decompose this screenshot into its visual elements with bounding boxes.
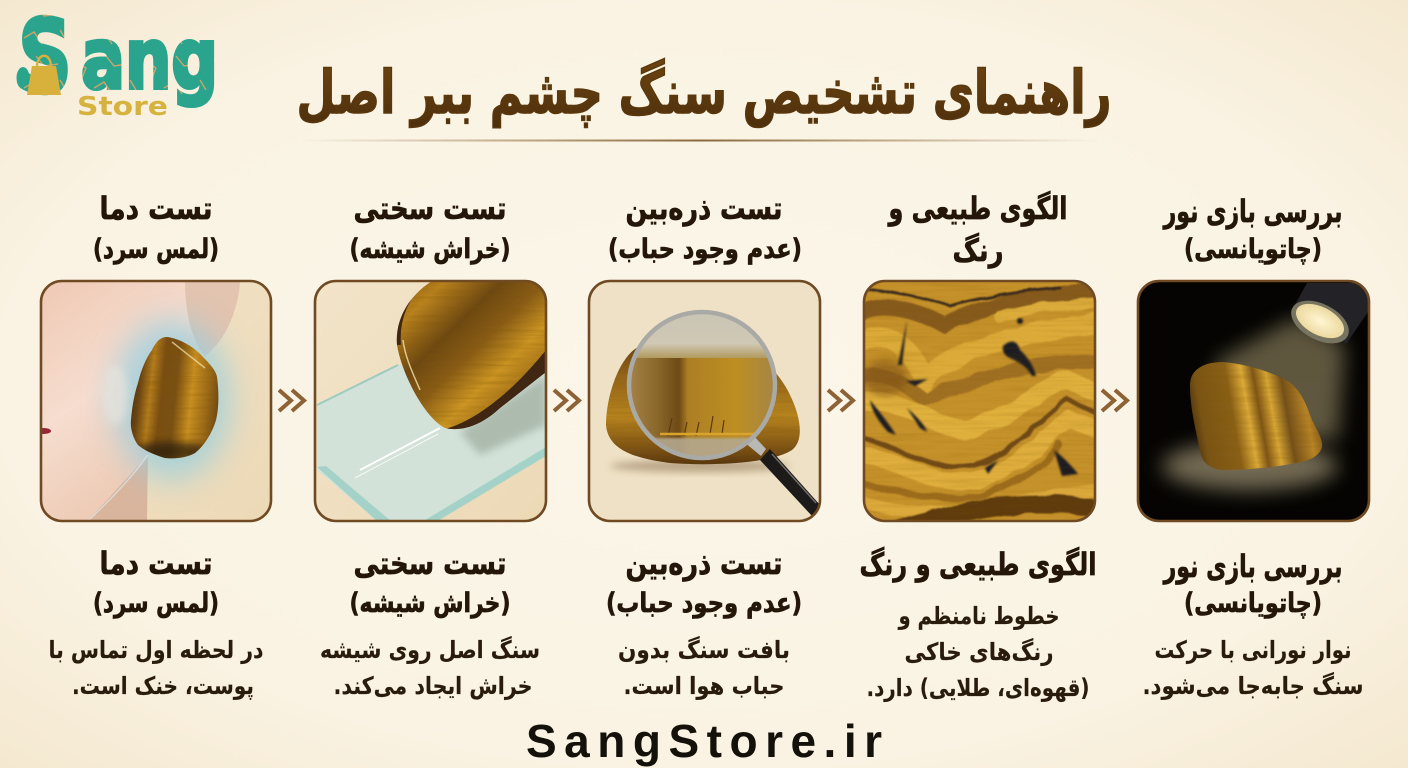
heading: column 3 top bbox=[608, 191, 802, 265]
column 1 caption: در لحظه اول تماس با bbox=[48, 636, 264, 664]
column 1 caption bbox=[48, 546, 264, 700]
icon: spotlight lamp bbox=[1291, 283, 1368, 344]
logo: Sang Store: S bbox=[18, 0, 72, 117]
glass plate bbox=[316, 364, 545, 520]
heading: column 3 top: تست ذره‌بین bbox=[626, 191, 782, 227]
column 3 caption: تست ذره‌بین bbox=[626, 546, 782, 582]
panel 1: temperature test image bbox=[37, 280, 272, 522]
heading: column 2 top bbox=[350, 191, 510, 265]
column 3 caption: حباب هوا است. bbox=[624, 672, 784, 700]
arrow 4 bbox=[1102, 390, 1127, 411]
heading: column 4 top: رنگ bbox=[952, 233, 1004, 269]
panel 3: magnifier test image bbox=[588, 280, 820, 522]
arrow 1 bbox=[279, 390, 304, 411]
logo: Sang Store bbox=[16, 0, 218, 122]
column 1 caption: تست دما bbox=[100, 546, 212, 582]
icon: tiger eye stone scratching glass bbox=[396, 282, 545, 430]
column 1 caption: (لمس سرد) bbox=[93, 588, 219, 619]
icon: shopping bag bbox=[27, 56, 61, 95]
column 2 caption: خراش ایجاد می‌کند. bbox=[334, 672, 532, 700]
heading: column 2 top: (خراش شیشه) bbox=[350, 234, 510, 265]
heading: column 5 top: بررسی بازی نور bbox=[1162, 194, 1342, 230]
title: راهنمای تشخیص سنگ چشم ببر اصل bbox=[296, 58, 1112, 128]
footer website: SangStore.ir bbox=[526, 715, 882, 767]
arrow 2 bbox=[554, 390, 579, 411]
stone inclusions bbox=[870, 318, 1078, 476]
heading: column 5 top bbox=[1162, 194, 1342, 265]
heading: column 2 top: تست سختی bbox=[354, 191, 506, 227]
light beam bbox=[1215, 318, 1345, 440]
column 5 caption: سنگ جابه‌جا می‌شود. bbox=[1142, 672, 1364, 700]
column 4 caption: رنگ‌های خاکی bbox=[904, 638, 1054, 666]
icon: tiger eye stone bbox=[606, 348, 800, 464]
column 2 caption bbox=[320, 546, 540, 700]
column 5 caption bbox=[1142, 549, 1364, 700]
column 4 caption: الگوی طبیعی و رنگ bbox=[860, 546, 1096, 583]
panel 5: chatoyancy light test image bbox=[1137, 280, 1369, 522]
heading: column 5 top: (چاتویانسی) bbox=[1184, 234, 1322, 265]
column 5 caption: نوار نورانی با حرکت bbox=[1154, 636, 1352, 664]
column 2 caption: تست سختی bbox=[354, 546, 506, 582]
column 5 caption: بررسی بازی نور bbox=[1162, 549, 1342, 585]
panel 2: hardness test image bbox=[314, 270, 560, 522]
arrow 3 bbox=[828, 390, 853, 411]
icon: tiger eye stone glowing bbox=[1190, 362, 1322, 470]
heading: column 1 top: (لمس سرد) bbox=[93, 234, 219, 265]
heading: column 3 top: (عدم وجود حباب) bbox=[608, 234, 802, 265]
heading: column 4 top: الگوی طبیعی و bbox=[887, 190, 1068, 227]
column 4 caption: خطوط نامنظم و bbox=[898, 602, 1060, 630]
heading: column 4 top bbox=[887, 190, 1068, 269]
column 3 caption bbox=[606, 546, 802, 700]
icon: tiger eye stone on cheek bbox=[130, 337, 218, 458]
column 3 caption: بافت سنگ بدون bbox=[618, 636, 790, 664]
logo: Sang Store: ang bbox=[81, 10, 218, 108]
column 1 caption: پوست، خنک است. bbox=[72, 672, 254, 700]
column 2 caption: سنگ اصل روی شیشه bbox=[320, 636, 540, 664]
column 4 caption bbox=[860, 546, 1096, 702]
column 4 caption: (قهوه‌ای، طلایی) دارد. bbox=[866, 674, 1090, 702]
column 5 caption: (چاتویانسی) bbox=[1184, 588, 1322, 619]
column 3 caption: (عدم وجود حباب) bbox=[606, 588, 802, 619]
icon: magnifying glass bbox=[628, 310, 820, 516]
heading: column 1 top: تست دما bbox=[100, 191, 212, 227]
column 2 caption: (خراش شیشه) bbox=[350, 588, 510, 619]
panel 4: natural pattern image bbox=[855, 278, 1100, 528]
logo: Sang Store: Store bbox=[77, 92, 168, 122]
heading: column 1 top bbox=[93, 191, 219, 265]
